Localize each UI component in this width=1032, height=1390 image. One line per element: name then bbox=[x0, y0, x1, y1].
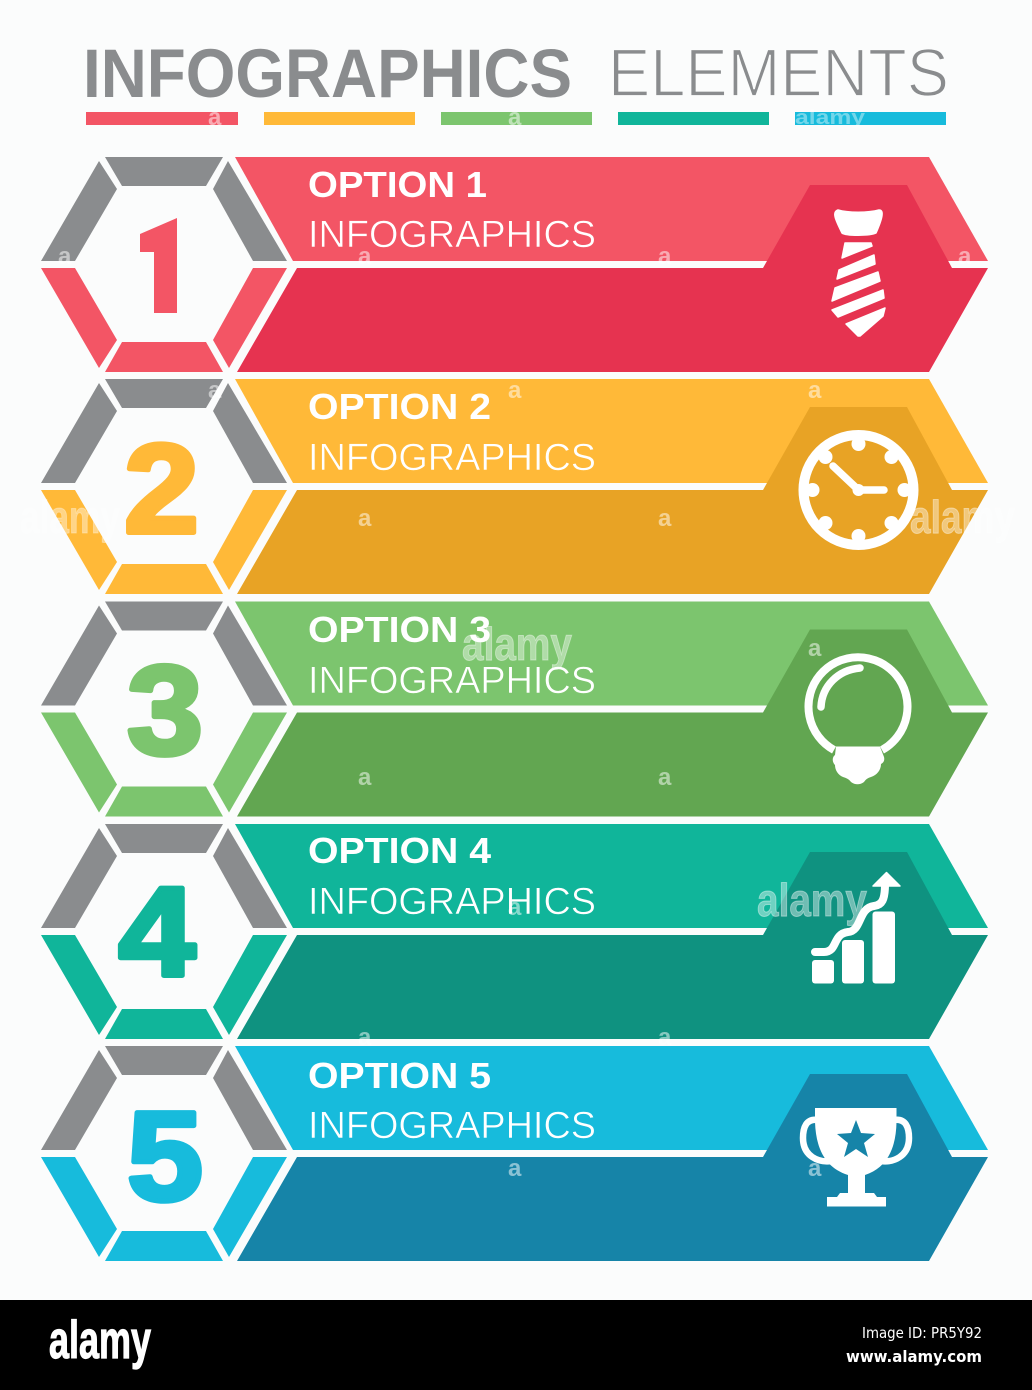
title bbox=[83, 35, 949, 112]
band 5 bbox=[235, 1046, 988, 1261]
icon: trophy bbox=[803, 1108, 909, 1206]
title colour bars bbox=[86, 112, 946, 125]
title: ELEMENTS bbox=[608, 35, 949, 111]
watermarks: a bbox=[208, 104, 222, 131]
band 1 bbox=[235, 157, 988, 372]
watermarks: a bbox=[808, 635, 822, 662]
label: infographics 4: INFOGRAPHICS bbox=[308, 881, 596, 923]
label: option 4: OPTION 4 bbox=[308, 830, 491, 871]
hexagon badge 3 bbox=[41, 602, 287, 816]
footer logo: alamy bbox=[49, 1311, 151, 1370]
panel: option 5 bbox=[41, 1046, 988, 1261]
label: option 2: OPTION 2 bbox=[308, 386, 491, 427]
label: infographics 3: INFOGRAPHICS bbox=[308, 660, 596, 702]
hexagon badge 1 bbox=[41, 157, 287, 372]
hexagon badge 5: 5 bbox=[127, 1085, 203, 1227]
title: INFOGRAPHICS bbox=[83, 35, 572, 112]
watermarks: a bbox=[58, 243, 72, 270]
watermarks: a bbox=[508, 894, 522, 921]
watermarks: a bbox=[658, 243, 672, 270]
image id: Image ID: PR5Y92 bbox=[862, 1324, 982, 1342]
watermarks: alamy bbox=[795, 107, 866, 129]
hexagon badge 2: 2 bbox=[124, 418, 199, 560]
icon: clock bbox=[804, 435, 914, 545]
panel: option 4 bbox=[41, 824, 988, 1039]
watermarks: a bbox=[208, 377, 222, 404]
watermarks: alamy bbox=[462, 618, 572, 670]
watermarks: alamy bbox=[757, 874, 867, 926]
watermarks: a bbox=[958, 243, 972, 270]
label: infographics 5: INFOGRAPHICS bbox=[308, 1105, 596, 1147]
label: option 1: OPTION 1 bbox=[308, 164, 487, 205]
hexagon badge 3: 3 bbox=[127, 639, 203, 781]
watermarks: a bbox=[358, 243, 372, 270]
watermarks: a bbox=[808, 377, 822, 404]
band 2 bbox=[235, 379, 988, 594]
watermarks: a bbox=[658, 505, 672, 532]
watermarks: a bbox=[658, 764, 672, 791]
panel: option 3 bbox=[41, 602, 988, 816]
watermarks: a bbox=[508, 1155, 522, 1182]
icon: necktie bbox=[832, 210, 885, 336]
hexagon badge 5 bbox=[41, 1046, 287, 1261]
watermarks: alamy bbox=[20, 491, 120, 543]
label: option 5: OPTION 5 bbox=[308, 1055, 491, 1096]
watermarks: a bbox=[658, 1024, 672, 1051]
watermarks: a bbox=[358, 505, 372, 532]
icon: growth chart bbox=[812, 872, 900, 984]
label: option 3: OPTION 3 bbox=[308, 609, 491, 650]
hexagon badge 4: 4 bbox=[118, 860, 196, 1002]
band 4 bbox=[235, 824, 988, 1039]
watermarks bbox=[20, 104, 1015, 1182]
label: infographics 1: INFOGRAPHICS bbox=[308, 214, 596, 256]
icon: light bulb bbox=[808, 657, 907, 784]
watermarks: a bbox=[358, 1024, 372, 1051]
footer bar bbox=[0, 1300, 1032, 1390]
hexagon badge 4 bbox=[41, 824, 287, 1039]
panel: option 2 bbox=[41, 379, 988, 594]
panel: option 1 bbox=[41, 157, 988, 372]
website: www.alamy.com bbox=[846, 1347, 982, 1366]
watermarks: a bbox=[358, 764, 372, 791]
watermarks: a bbox=[508, 104, 522, 131]
band 3 bbox=[235, 602, 988, 816]
watermarks: a bbox=[808, 1155, 822, 1182]
label: infographics 2: INFOGRAPHICS bbox=[308, 437, 596, 479]
watermarks: a bbox=[508, 377, 522, 404]
hexagon badge 2 bbox=[41, 379, 287, 594]
